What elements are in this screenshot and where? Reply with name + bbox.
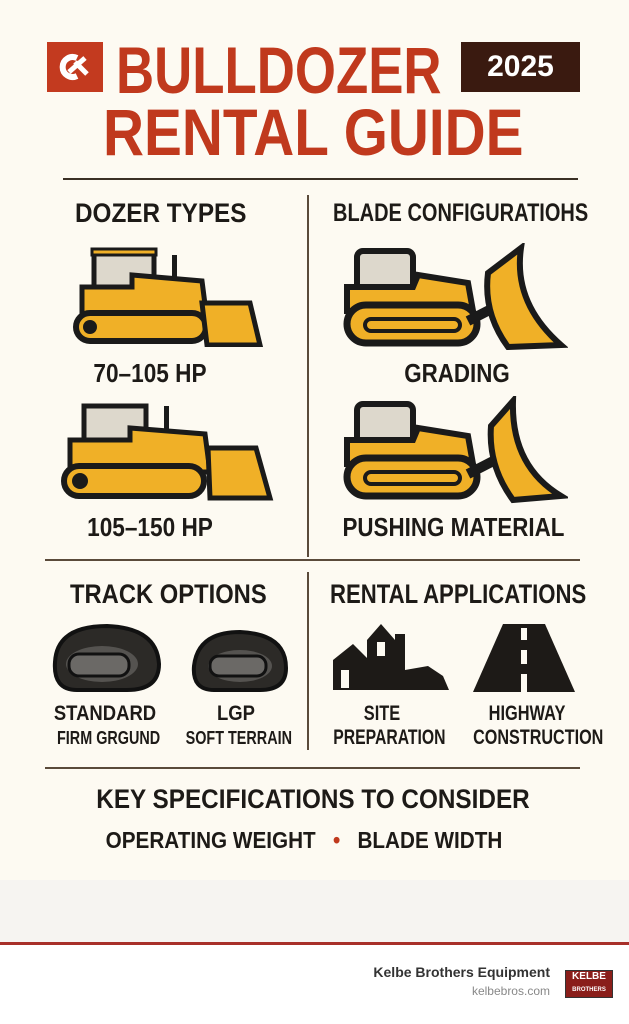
label: site preparation: SITE: [364, 702, 400, 725]
footer logo: [565, 970, 613, 998]
heading: dozer types: DOZER TYPES: [75, 198, 246, 228]
header logo icon: [47, 42, 103, 92]
icon: standard track: [52, 624, 161, 692]
title line 2: RENTAL GUIDE: [103, 95, 523, 169]
heading: track options: TRACK OPTIONS: [70, 579, 267, 609]
label: LGP: SOFT TERRAIN: [186, 728, 292, 748]
footer logo: BROTHERS: [572, 987, 606, 993]
spec items: OPERATING WEIGHT • BLADE WIDTH: [106, 827, 502, 853]
icon: grading dozer: [344, 243, 568, 350]
label: pushing material: PUSHING MATERIAL: [342, 512, 564, 542]
footer band: [0, 880, 629, 942]
label: 70-105 HP: 70–105 HP: [93, 358, 207, 388]
label: grading: GRADING: [404, 358, 510, 388]
footer company text: Kelbe Brothers Equipment: [373, 964, 550, 980]
footer logo: KELBE: [572, 971, 606, 982]
label: site preparation: [333, 702, 446, 749]
label: 105-150 HP: 105–150 HP: [87, 512, 213, 542]
heading: rental applications: RENTAL APPLICATIONS: [330, 579, 586, 609]
icon: medium dozer: [61, 404, 274, 500]
label: standard: STANDARD: [54, 702, 156, 725]
icon: pushing dozer: [344, 396, 568, 504]
heading: blade configurations: BLADE CONFIGURATIOHS: [333, 199, 588, 227]
year badge: 2025: [487, 50, 554, 83]
label: highway construction: HIGHWAY: [489, 702, 565, 725]
label: LGP: [186, 702, 292, 748]
heading: key specifications: KEY SPECIFICATIONS TO CONSIDER: [96, 784, 530, 814]
label: highway construction: CONSTRUCTION: [473, 726, 603, 749]
label: highway construction: [473, 702, 603, 749]
label: standard: FIRM GRGUND: [57, 728, 160, 748]
footer company text: kelbebros.com: [472, 984, 550, 998]
label: site preparation: PREPARATION: [333, 726, 446, 749]
icon: LGP track: [192, 630, 288, 692]
icon: small dozer: [73, 248, 263, 347]
footer company text: [373, 964, 550, 998]
year badge: [461, 42, 580, 92]
label: LGP: LGP: [217, 702, 255, 725]
label: standard: [54, 702, 160, 748]
icon: highway: [473, 624, 575, 692]
icon: site preparation: [333, 624, 449, 690]
title line 1: BULLDOZER: [116, 33, 442, 107]
